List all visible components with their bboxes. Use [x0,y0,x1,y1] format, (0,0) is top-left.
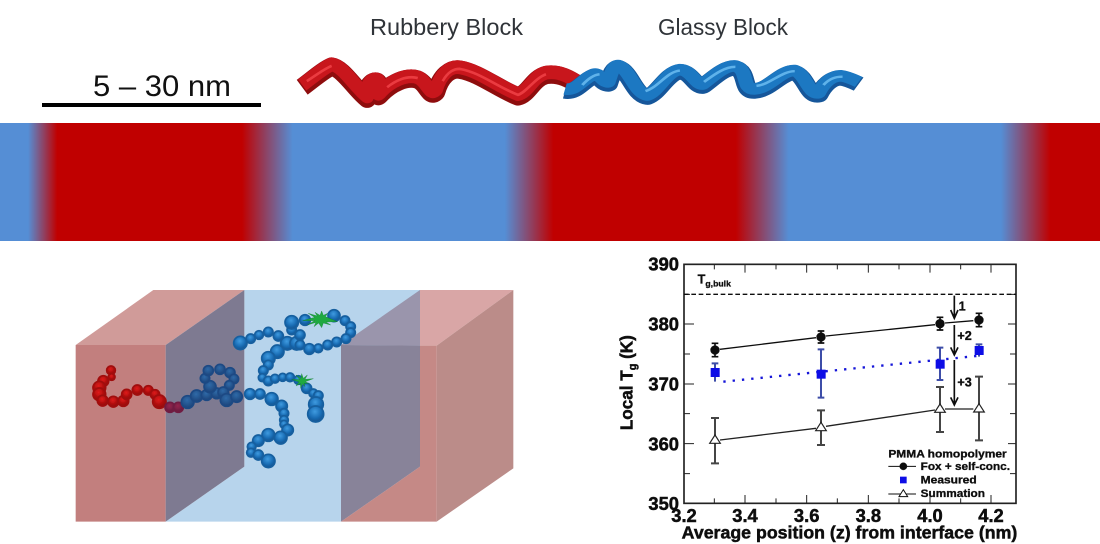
legend: Summation [921,488,985,500]
y axis tick labels [648,254,679,514]
x axis title: Average position (z) from interface (nm) [682,523,1017,543]
x axis tick labels: 4.0 [917,505,943,526]
left interface face [166,290,244,522]
x axis tick labels: 3.6 [794,505,819,526]
y axis tick labels: 370 [648,374,679,395]
annotation labels: +2 [957,329,972,343]
heading: rubbery block label: Rubbery Block [370,14,523,40]
polymer bead chain [93,310,355,468]
x axis tick labels: 3.8 [856,505,881,526]
centre glassy domain [166,290,420,522]
red rubbery chain [302,64,580,99]
y axis tick labels: 380 [648,314,679,335]
x axis tick labels: 3.2 [671,505,697,526]
chart: local Tg versus position [617,254,1017,543]
legend: Fox + self-conc. [921,461,1010,473]
legend [888,448,1010,500]
x axis tick labels [671,505,1004,526]
series: measured [711,344,984,398]
annotation labels: 1 [959,299,966,313]
annotation labels: +3 [957,376,972,390]
right rubbery block [341,290,513,522]
x axis tick labels: 4.2 [978,505,1004,526]
bulk Tg dashed reference [684,272,1016,294]
heading: glassy block label: Glassy Block [658,14,788,40]
scale bar label: 5 – 30 nm [93,70,231,103]
bulk Tg dashed reference: T [698,272,705,286]
left rubbery block [76,290,244,522]
y axis title: (K) [617,335,637,364]
legend: Measured [921,475,977,487]
bulk Tg dashed reference: g,bulk [705,279,731,289]
series: Fox plus self-concentration [710,313,984,357]
icon: green star lower [292,374,313,388]
y axis tick labels: 360 [648,434,679,455]
blue glassy chain [565,66,859,97]
annotation arrows [951,296,958,405]
scale bar [42,103,261,107]
lamellar morphology strip [0,123,1100,241]
annotation labels [957,299,972,390]
series: summation [710,377,984,463]
panel: 3D lamellar box with polymer chain [76,290,513,522]
legend: PMMA homopolymer [888,448,1007,460]
right interface face [341,290,420,522]
y axis tick labels: 350 [648,493,679,514]
icon: green star upper [303,311,337,328]
icon: block copolymer chain [302,64,859,99]
x axis tick labels: 3.4 [732,505,759,526]
y axis tick labels: 390 [648,254,679,275]
y axis title: Local T [617,367,637,430]
plot frame [684,264,1016,503]
y axis title: g [627,364,639,370]
